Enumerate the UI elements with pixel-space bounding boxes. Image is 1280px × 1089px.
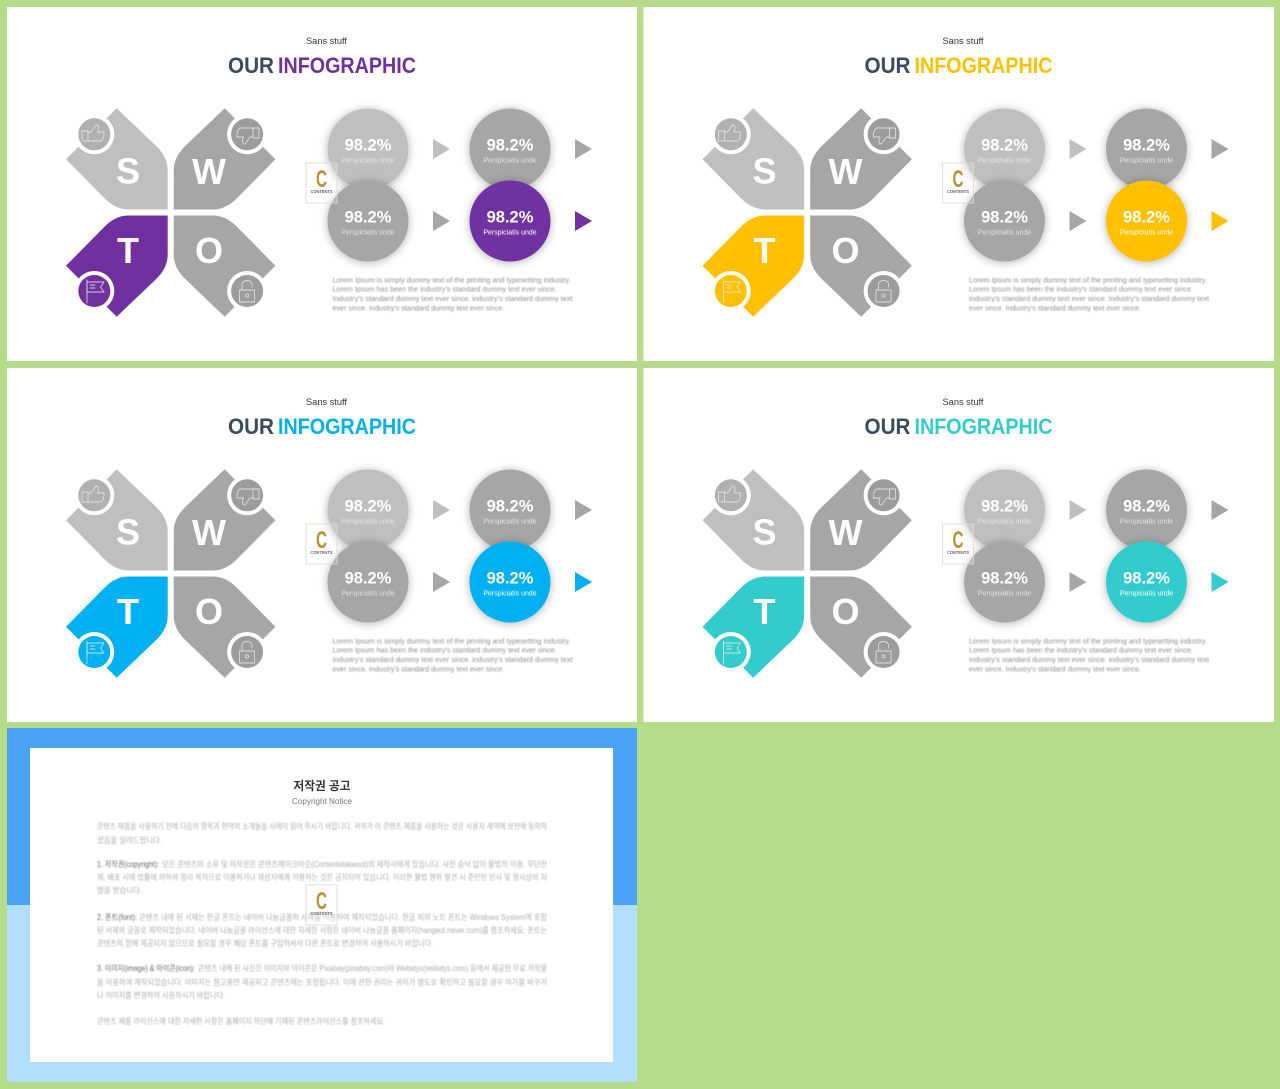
petal S: S	[116, 512, 140, 552]
body text	[969, 278, 1209, 312]
notice section 3: 나 이미지를 변경하여 사용하시기 바랍니다.	[97, 990, 225, 1000]
petal S: S	[116, 150, 140, 192]
stat 3	[964, 542, 1045, 622]
title: INFOGRAPHIC	[278, 53, 416, 78]
petal T	[66, 216, 168, 317]
subtitle: Sans stuff	[306, 397, 348, 407]
notice section 1: 모든 콘텐츠의 소유 및 저작권은 콘텐츠메이크아웃(Contentstakeout)의 제작사에게 있습니다. 사전 승낙 없이 불법적 이용, 무단전	[162, 859, 547, 869]
title: INFOGRAPHIC	[914, 53, 1053, 78]
body text: Industry's standard dummy text ever since. industry's standard dummy text	[969, 296, 1209, 303]
petal W	[810, 469, 912, 570]
body text: Industry's standard dummy text ever since. industry's standard dummy text	[969, 657, 1209, 664]
petal O	[174, 576, 275, 678]
stat 1	[964, 470, 1045, 550]
title	[864, 414, 1053, 439]
title	[228, 53, 416, 78]
watermark	[306, 163, 337, 203]
stat 3: Perspiciatis unde	[341, 230, 395, 236]
stat 4: Perspiciatis unde	[483, 230, 537, 236]
notice section 1	[97, 859, 547, 895]
petal S: S	[752, 512, 777, 552]
title: INFOGRAPHIC	[914, 414, 1053, 439]
stat 3	[964, 180, 1045, 262]
stat 3: Perspiciatis unde	[978, 590, 1031, 598]
subtitle: Sans stuff	[942, 36, 984, 46]
panel: copyright notice	[7, 728, 637, 1082]
stat 3: 98.2%	[345, 570, 392, 588]
body text: ever since. Industry's standard dummy text ever since.	[332, 666, 505, 674]
stat 2: Perspiciatis unde	[1120, 518, 1173, 526]
body text: Lorem Ipsum has been the industry's standard dummy text ever since.	[332, 648, 557, 654]
body text	[969, 638, 1209, 674]
notice intro: 콘텐츠 제품을 사용하기 전에 다음의 항목과 현약의 소개들을 사례이 읽어 주시기 바랍니다. 귀하가 이 콘텐츠 제품을 사용하는 것은 사용자 계약에 보전에 동의하	[97, 821, 548, 831]
stat 2: 98.2%	[1123, 498, 1170, 516]
body text: ever since. Industry's standard dummy text ever since.	[969, 666, 1141, 674]
petal W	[174, 108, 275, 210]
petal O	[174, 216, 275, 317]
notice section 3: 3. 이미지(image) & 아이콘(icon):	[97, 963, 195, 973]
stat 2	[1106, 108, 1187, 190]
stat 2: Perspiciatis unde	[483, 158, 537, 164]
stat 1: Perspiciatis unde	[341, 518, 395, 526]
petal O	[810, 216, 912, 317]
stat 4: 98.2%	[487, 208, 534, 226]
stat 4	[1106, 542, 1187, 622]
stat 2: 98.2%	[487, 136, 534, 154]
title: OUR	[228, 414, 274, 439]
petal T	[702, 216, 804, 317]
body text: ever since. Industry's standard dummy text ever since.	[332, 306, 505, 312]
stat 2: Perspiciatis unde	[483, 518, 537, 526]
stat 1: Perspiciatis unde	[978, 158, 1031, 164]
body text: Lorem Ipsum is simply dummy text of the printing and typesetting industry.	[332, 278, 571, 284]
stat 1: 98.2%	[981, 136, 1028, 154]
watermark	[942, 524, 974, 564]
petal O: O	[831, 230, 860, 271]
stat 2	[470, 108, 550, 190]
stat 3: Perspiciatis unde	[978, 230, 1031, 236]
stat circles	[328, 108, 550, 262]
stat 1: Perspiciatis unde	[978, 518, 1031, 526]
petal T: T	[117, 591, 139, 632]
body text: Industry's standard dummy text ever since. industry's standard dummy text	[332, 296, 573, 303]
stat 3	[328, 542, 408, 622]
stat 2	[1106, 470, 1187, 550]
petal T	[702, 576, 804, 678]
stat 1: 98.2%	[345, 498, 392, 516]
petal W: W	[192, 512, 226, 553]
title	[228, 414, 416, 439]
panel: teal infographic	[644, 368, 1274, 722]
stat 1	[964, 108, 1045, 190]
notice heading: 저작권 공고	[294, 778, 350, 793]
title: INFOGRAPHIC	[278, 414, 416, 439]
notice section 2: 콘텐츠의 함께 제공되지 않으므로 필요할 경우 해당 폰트를 구입하셔서 다른 폰트로 변경하여 사용하시기 바랍니다.	[97, 938, 433, 948]
petal T	[66, 576, 168, 678]
notice intro	[97, 821, 548, 845]
body text: Lorem Ipsum has been the industry's standard dummy text ever since.	[969, 648, 1193, 654]
petal W: W	[829, 151, 863, 192]
stat 4	[470, 180, 550, 262]
stat 3: 98.2%	[981, 208, 1028, 226]
petal S	[702, 108, 804, 210]
stat 3: Perspiciatis unde	[341, 590, 395, 598]
notice section 1: 재, 배포 시에 법률에 의하여 영리 목적으로 이용하거나 제삼자에게 이용하는 것은 금지되어 있습니다. 이러한 불법 행위 발견 시 준민민 민사 및 형사상의 처	[97, 872, 547, 882]
watermark	[942, 163, 974, 203]
petal O: O	[831, 591, 860, 632]
body text	[332, 638, 573, 674]
notice footer: 콘텐츠 제품 라이선스에 대한 자세한 사항은 홈페이지 하단에 기재된 콘텐츠라이선스를 참조하세요.	[97, 1016, 385, 1026]
stat 2	[470, 470, 550, 550]
arrows	[1070, 500, 1228, 592]
arrows	[1070, 139, 1228, 231]
body text: Lorem Ipsum has been the industry's standard dummy text ever since.	[969, 286, 1193, 294]
stat 4: Perspiciatis unde	[483, 590, 537, 598]
stat 4	[1106, 180, 1187, 262]
panel: purple infographic	[7, 7, 637, 361]
stat circles	[964, 108, 1187, 262]
subtitle: Sans stuff	[942, 397, 984, 407]
stat 4: 98.2%	[1123, 570, 1170, 588]
stat 3: 98.2%	[345, 208, 392, 226]
petal O	[810, 576, 912, 678]
petal S	[702, 469, 804, 570]
SWOT diagram	[66, 108, 275, 317]
petal W: W	[192, 151, 226, 192]
notice subheading: Copyright Notice	[292, 796, 352, 806]
petal S	[66, 108, 168, 210]
petal T: T	[117, 230, 139, 271]
SWOT diagram	[66, 469, 275, 678]
notice section 2: 콘텐츠 내에 된 서체는 한글 폰트는 네이버 나눔글꼴의 서체를 사용하여 제작되었습니다. 한글 외의 노트 폰트는 Windows System에 포함	[139, 912, 548, 922]
petal O: O	[195, 591, 223, 632]
stat 4: Perspiciatis unde	[1120, 230, 1173, 236]
stat 4: Perspiciatis unde	[1120, 590, 1173, 598]
watermark	[306, 524, 337, 564]
body text: Lorem Ipsum is simply dummy text of the printing and typesetting industry.	[332, 638, 571, 646]
petal W	[174, 469, 275, 570]
petal W	[810, 108, 912, 210]
notice section 2: 2. 폰트(font):	[97, 913, 137, 922]
title	[864, 53, 1053, 78]
stat 4: 98.2%	[1123, 208, 1170, 226]
notice section 1: 벌을 받습니다.	[97, 885, 142, 895]
stat 3	[328, 180, 408, 262]
stat 1: 98.2%	[981, 498, 1028, 516]
notice intro: 셨음을 알려드립니다.	[97, 835, 162, 845]
stat 1: 98.2%	[345, 136, 392, 154]
stat 2: Perspiciatis unde	[1120, 158, 1173, 164]
petal W: W	[829, 512, 863, 553]
stat 2: 98.2%	[487, 498, 534, 516]
notice section 3	[97, 963, 547, 1000]
stat 4	[470, 542, 550, 622]
body text: ever since. Industry's standard dummy text ever since.	[969, 306, 1141, 312]
panel: blue infographic	[7, 368, 637, 722]
stat circles	[328, 470, 550, 622]
panel: yellow infographic	[644, 7, 1274, 361]
body text: Lorem Ipsum is simply dummy text of the printing and typesetting industry.	[969, 278, 1207, 284]
petal S	[66, 469, 168, 570]
stat 1	[328, 470, 408, 550]
stat 1	[328, 108, 408, 190]
notice section 3: 을 이용하여 제작되었습니다. 이미지는 참고용만 제공되고 콘텐츠에는 포함됩니다. 이에 관한 권리는 귀하가 별도로 확인하고 필요할 경우 여기를 바꾸거	[97, 977, 547, 987]
body text: Industry's standard dummy text ever since. industry's standard dummy text	[332, 657, 573, 664]
petal T: T	[754, 591, 776, 632]
notice section 1: 1. 저작권(copyright):	[97, 859, 159, 869]
arrows	[433, 139, 592, 231]
SWOT diagram	[702, 108, 912, 317]
watermark	[306, 885, 337, 925]
body text: Lorem Ipsum has been the industry's standard dummy text ever since.	[332, 286, 557, 294]
subtitle: Sans stuff	[306, 36, 348, 46]
stat circles	[964, 470, 1187, 622]
stat 3: 98.2%	[981, 570, 1028, 588]
stat 1: Perspiciatis unde	[341, 158, 395, 164]
body text	[332, 278, 573, 312]
title: OUR	[228, 53, 274, 78]
stat 2: 98.2%	[1123, 136, 1170, 154]
stat 4: 98.2%	[487, 570, 534, 588]
petal S: S	[752, 150, 777, 192]
petal T: T	[754, 230, 776, 271]
petal O: O	[195, 230, 223, 271]
body text: Lorem Ipsum is simply dummy text of the printing and typesetting industry.	[969, 638, 1207, 646]
SWOT diagram	[702, 469, 912, 678]
notice section 2	[97, 912, 548, 948]
notice section 2: 된 서체의 글꼴로 제작되었습니다. 네이버 나눔글꼴 라이선스에 대한 자세한 사항은 네이버 나눔글꼴 홈페이지(hangeul.naver.com)를 참조하세요. 폰트는	[97, 925, 547, 935]
title: OUR	[864, 414, 911, 439]
arrows	[433, 500, 592, 592]
title: OUR	[864, 53, 911, 78]
notice section 3: 콘텐츠 내에 된 사진은 이미지와 아이콘은 Pixabay(pixabay.com)와 Webalys(webalys.com) 등에서 제공한 무료 저작물	[198, 963, 547, 973]
